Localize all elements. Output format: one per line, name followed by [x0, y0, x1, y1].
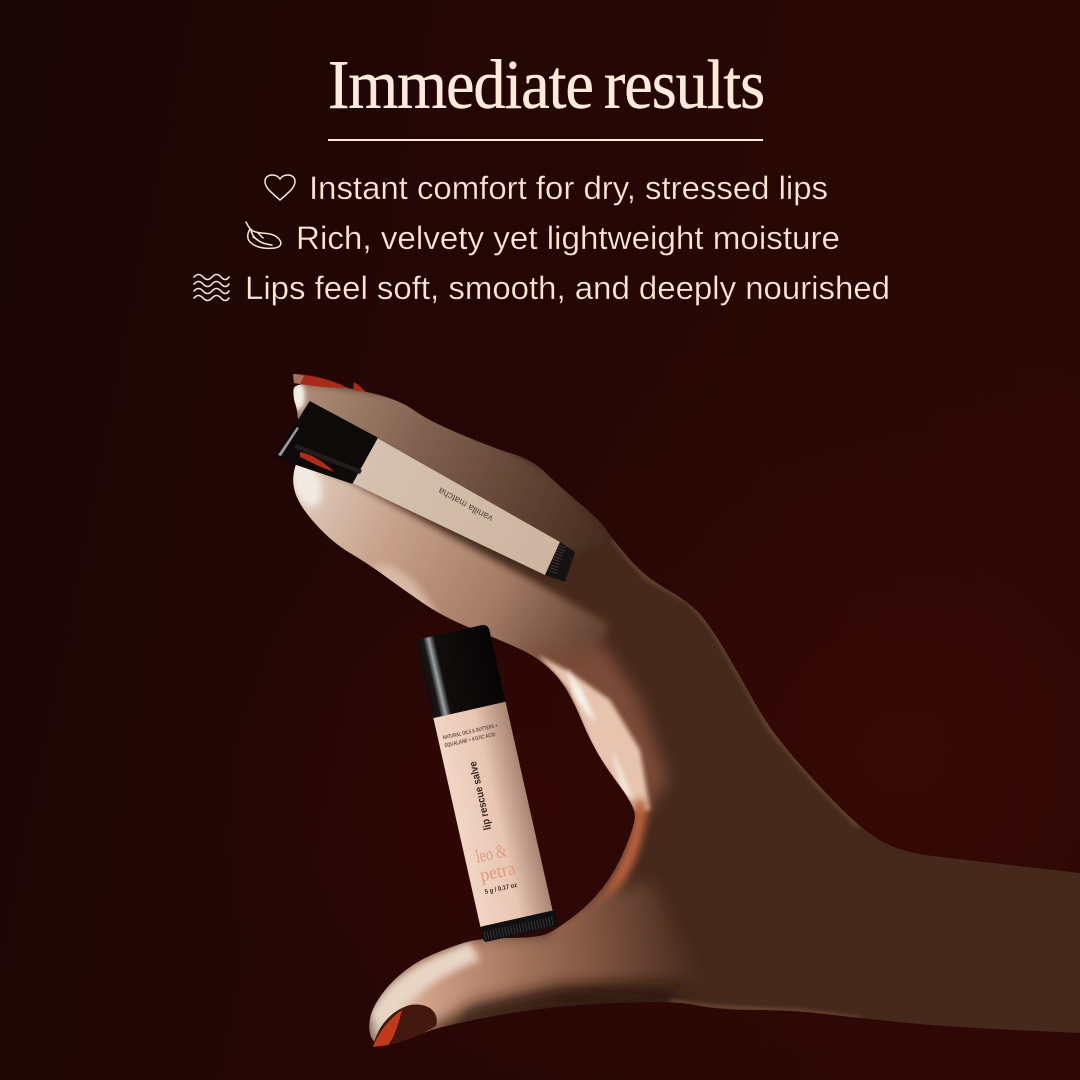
salve label [433, 702, 553, 927]
salve base ribs [485, 920, 555, 936]
salve base [480, 910, 558, 942]
icon: waves [194, 274, 229, 300]
benefits list [194, 170, 890, 306]
fingernails [293, 374, 437, 1047]
salve ingredients text: NATURAL OILS & BUTTERS + [442, 723, 498, 741]
title divider [328, 139, 763, 141]
balm body [352, 438, 560, 575]
icon: feather [246, 222, 281, 248]
salve brand: petra [478, 858, 518, 886]
balm base [545, 542, 575, 582]
salve brand [474, 839, 518, 886]
balm label text: vanilla matcha [436, 484, 495, 524]
salve ingredients text [442, 723, 500, 749]
hand holding products [280, 374, 1080, 1050]
benefit: soft and nourished: Lips feel soft, smooth, and deeply nourished [245, 270, 890, 306]
salve product name: lip rescue salve [467, 760, 494, 831]
icon: heart [265, 175, 295, 200]
salve brand: leo & [474, 840, 509, 868]
hand shading [280, 380, 860, 1050]
product: lip rescue salve balm [416, 623, 558, 942]
balm cap [275, 402, 377, 483]
hand silhouette [293, 384, 1080, 1044]
lower finger nail [300, 452, 334, 472]
title: Immediate results [328, 47, 764, 124]
salve weight: 5 g / 0.17 oz [484, 882, 519, 896]
benefit: instant comfort: Instant comfort for dry, stressed lips [309, 170, 828, 206]
salve ingredients text: SQUALANE + KOJIC ACID [444, 732, 496, 749]
product: vanilla matcha balm [275, 402, 575, 582]
benefit: velvety moisture: Rich, velvety yet lightweight moisture [296, 220, 840, 256]
salve cap [416, 624, 506, 718]
